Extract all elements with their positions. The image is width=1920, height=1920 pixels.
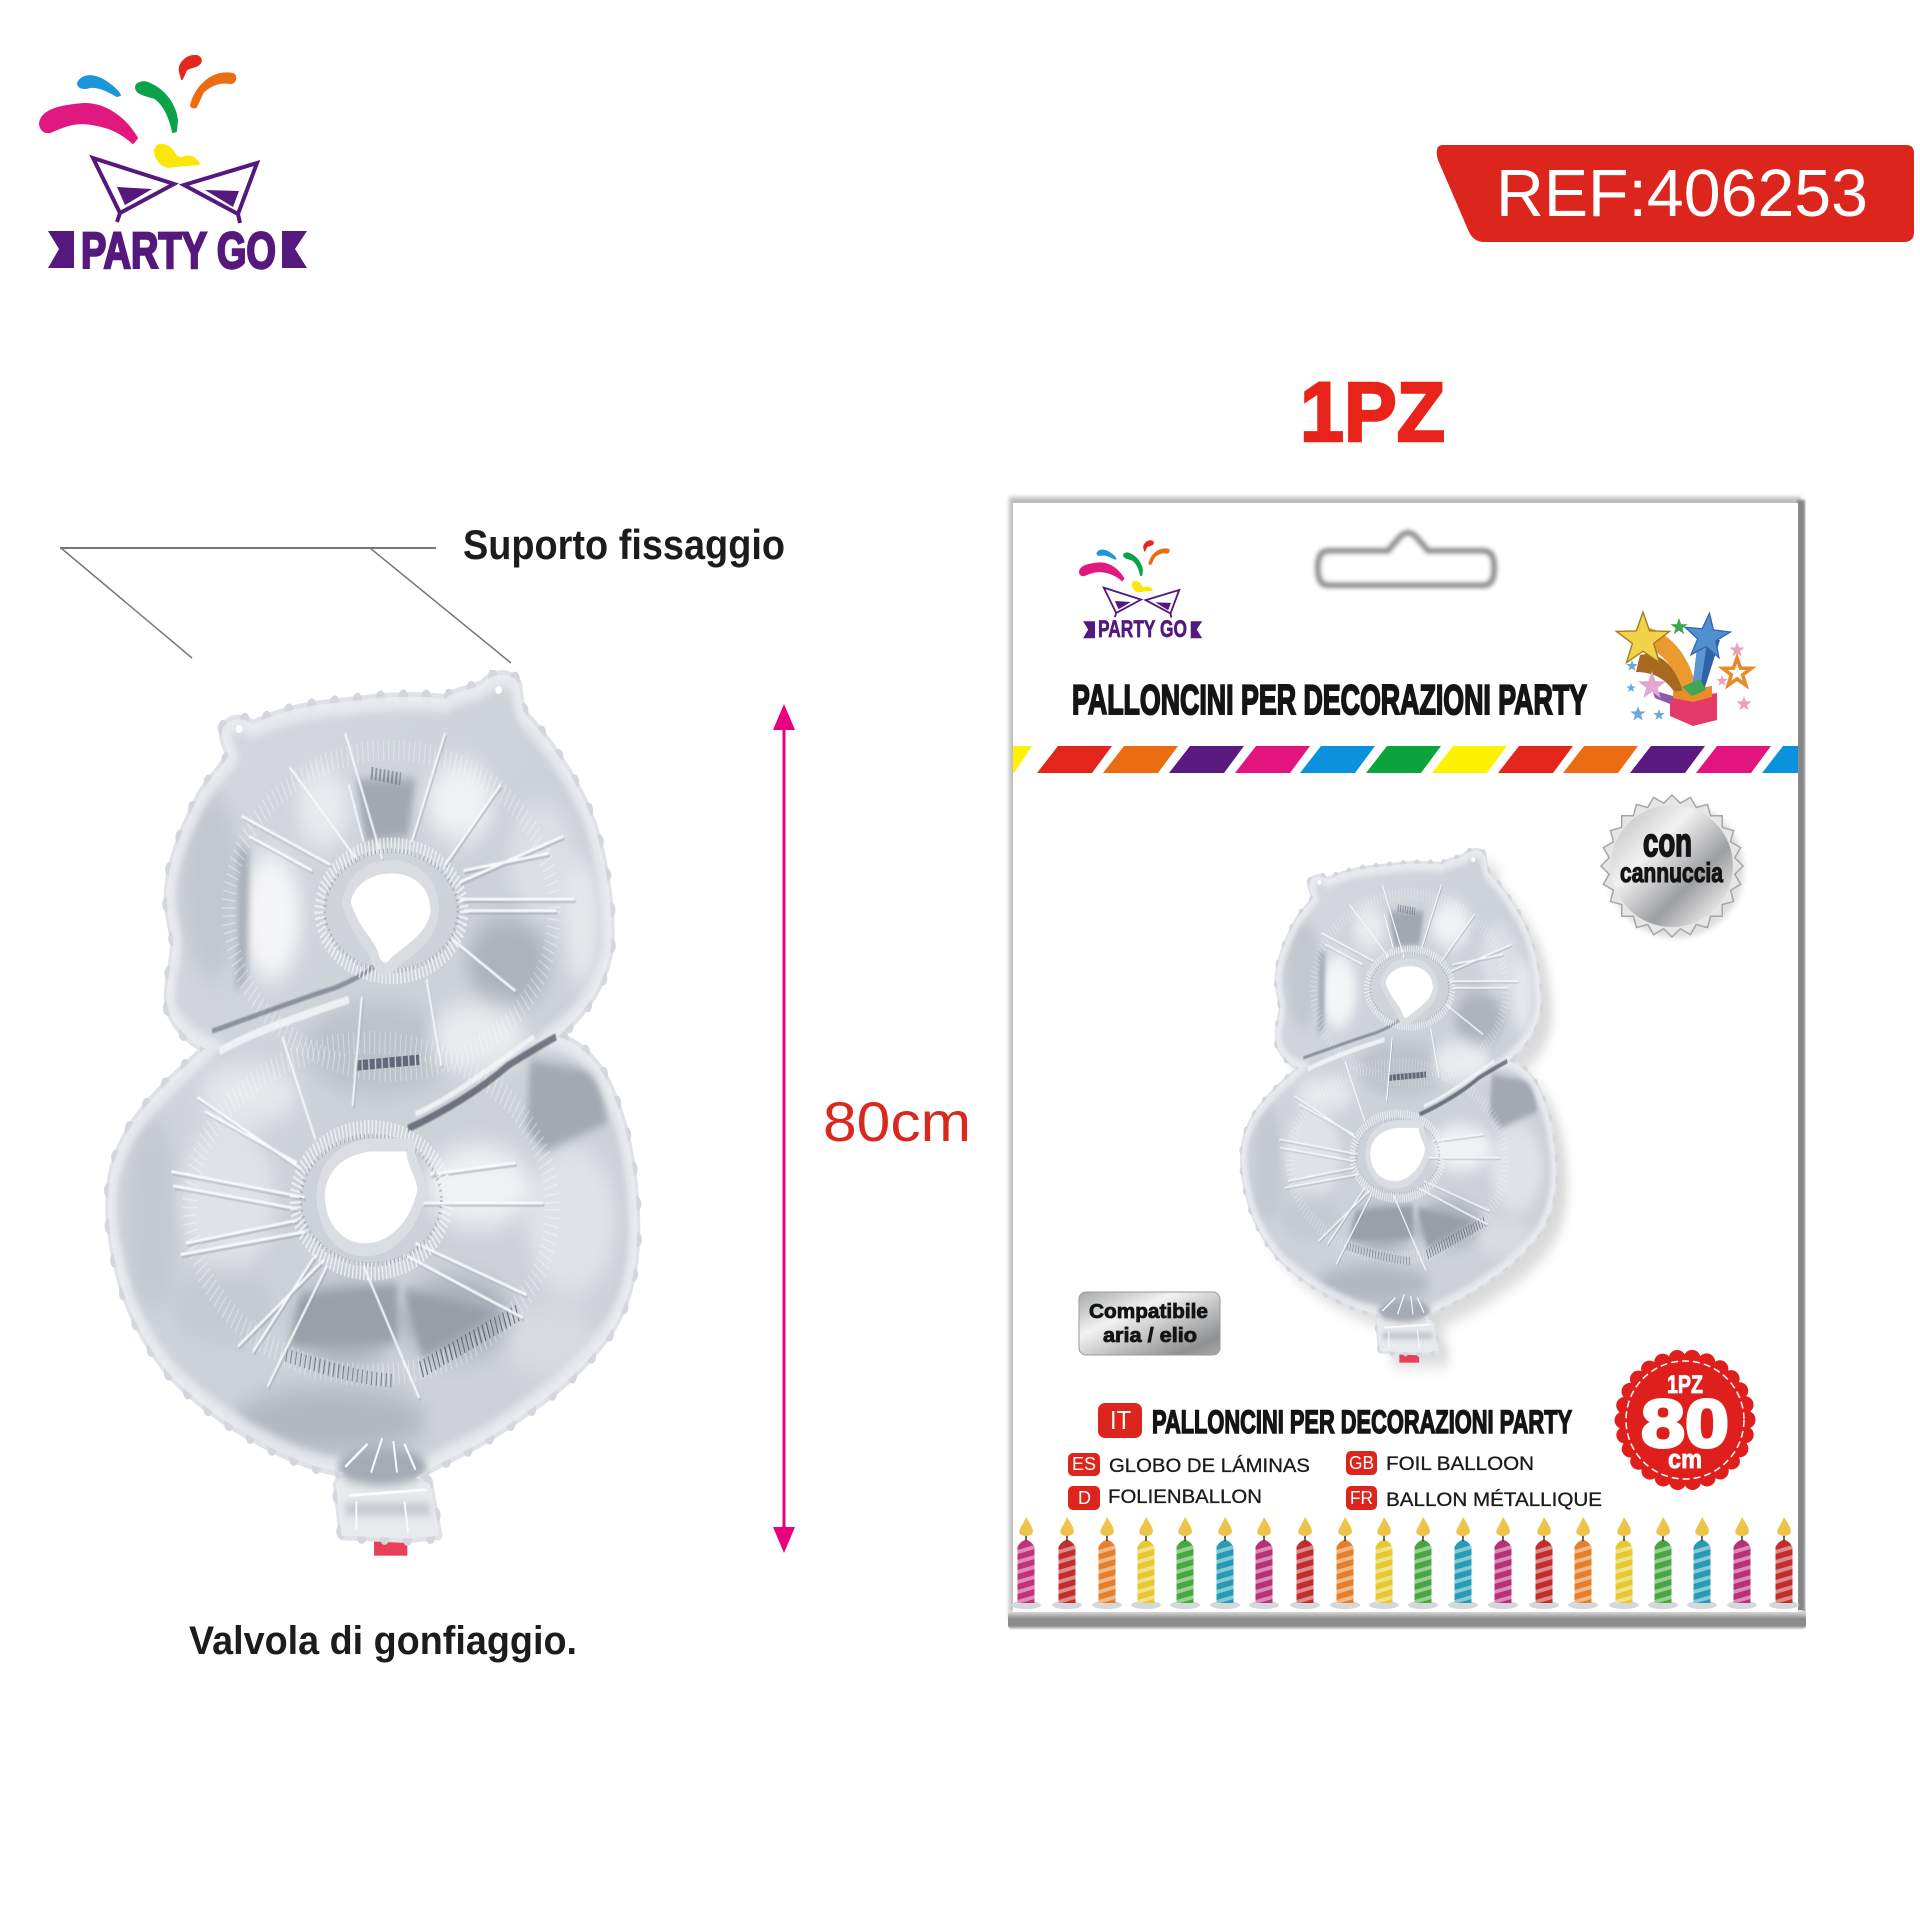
seal: 1PZ 80 cm [1623,1358,1747,1482]
callout lines: mounting support [60,548,511,663]
language row: ES: GLOBO DE LÁMINAS [1109,1456,1310,1477]
size arrow [773,704,795,1553]
seal: con cannuccia: cannuccia [1620,857,1723,888]
badge: Compatibile aria / elio [1079,1292,1220,1355]
card shadow [1008,497,1806,1630]
language row: FR: BALLON MÉTALLIQUE [1386,1490,1602,1511]
seal: con cannuccia: con [1643,821,1692,865]
seal: 1PZ 80 cm: 1PZ [1667,1371,1703,1399]
badge: Compatibile aria / elio: aria / elio [1103,1325,1197,1347]
icon: stars bursting from gift box [1616,611,1752,726]
logo: Party Go [40,56,307,279]
card title: PALLONCINI PER DECORAZIONI PARTY [1072,676,1587,723]
language row: IT: IT [1110,1405,1131,1435]
language row: FR: FR [1350,1488,1373,1508]
label: 80cm: 80cm [823,1090,971,1153]
logo: Party Go: PARTY GO [81,222,276,279]
seal: con cannuccia [1600,794,1744,938]
small logo: Party Go [1079,541,1202,643]
heading: 1PZ: 1PZ [1300,365,1445,459]
seal: 1PZ 80 cm: 80 [1641,1386,1729,1462]
label: Valvola di gonfiaggio: Valvola di gonfiaggio. [189,1619,577,1663]
language row: ES: ES [1072,1454,1096,1474]
language row: FR [1346,1486,1602,1511]
label: Suporto fissaggio: Suporto fissaggio [463,521,785,568]
language row: GB: GB [1349,1453,1374,1473]
product packaging card [1008,497,1806,1630]
reference banner [1437,145,1914,242]
large foil balloon number 8 [108,675,637,1556]
card face [1013,503,1798,1612]
language row: D: FOLIENBALLON [1108,1487,1262,1508]
hanger slot [1318,533,1494,585]
seal: 1PZ 80 cm: cm [1668,1444,1702,1474]
language row: GB: FOIL BALLOON [1386,1454,1534,1475]
product balloon number 8 [1242,851,1555,1363]
reference banner: REF:406253 [1496,156,1868,231]
language row: ES [1068,1453,1310,1477]
language row: D [1068,1486,1262,1510]
rainbow stripe band [1012,746,1802,773]
candle row [1011,1517,1799,1609]
language row: IT: PALLONCINI PER DECORAZIONI PARTY [1152,1404,1572,1440]
language row: IT [1098,1403,1572,1440]
language row: D: D [1078,1488,1091,1508]
balloon soft shadow [1254,865,1568,1366]
badge: Compatibile aria / elio: Compatibile [1089,1301,1208,1323]
language row: GB [1346,1451,1534,1475]
small logo: Party Go: PARTY GO [1098,616,1187,643]
